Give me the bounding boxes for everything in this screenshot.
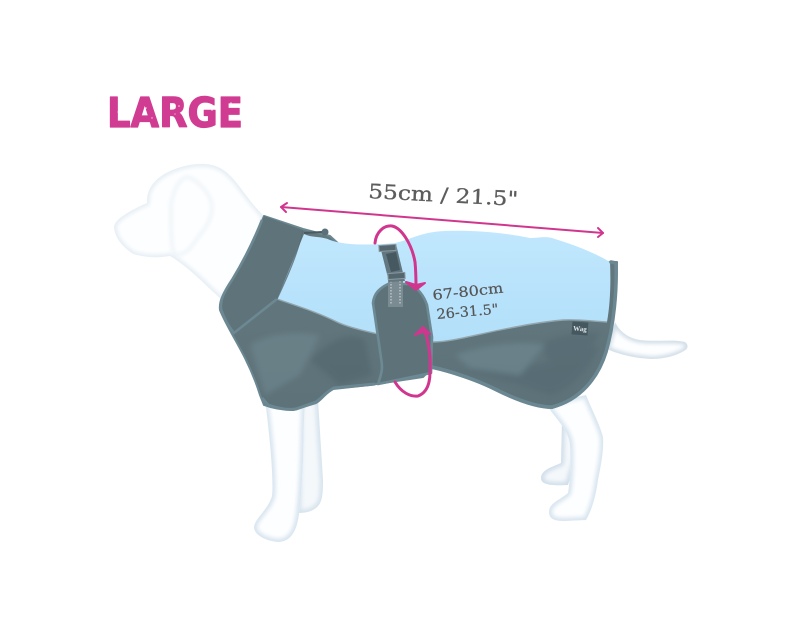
near front leg: [254, 400, 305, 542]
tail: [607, 322, 688, 359]
blue upper panel: [277, 231, 610, 342]
dog mannequin: [114, 164, 688, 542]
far front leg: [298, 400, 323, 513]
belly strap: [373, 284, 432, 384]
brand tag: [572, 321, 588, 336]
panel seam highlight: [277, 299, 607, 342]
dog coat: [220, 216, 617, 410]
head and neck: [114, 164, 264, 300]
coat body dark fabric: [220, 216, 617, 410]
length label: 55cm / 21.5": [368, 179, 519, 211]
length arrow: [281, 203, 603, 237]
far back leg: [541, 426, 570, 486]
brand tag: Wag: [573, 325, 587, 333]
buckle: [379, 244, 405, 282]
coat shadows: [250, 332, 600, 395]
infographic: large dog coat size guide: [110, 96, 688, 542]
strap webbing: [388, 279, 403, 307]
girth arrows: [375, 226, 430, 396]
bottom girth arrow: [395, 327, 430, 396]
near back leg: [546, 395, 603, 521]
coat trim edge right: [432, 262, 616, 407]
toggle: [304, 228, 328, 236]
collar seam: [235, 231, 303, 331]
girth label: 67-80cm: [432, 281, 504, 304]
coat trim edge belly: [262, 384, 375, 409]
girth label: 26-31.5": [436, 302, 499, 323]
collar trim: [221, 220, 277, 333]
ear: [171, 177, 212, 255]
title: LARGE: [107, 89, 243, 137]
neck trim: [220, 216, 303, 333]
top girth arrow: [375, 226, 425, 290]
girth label: [432, 281, 504, 323]
